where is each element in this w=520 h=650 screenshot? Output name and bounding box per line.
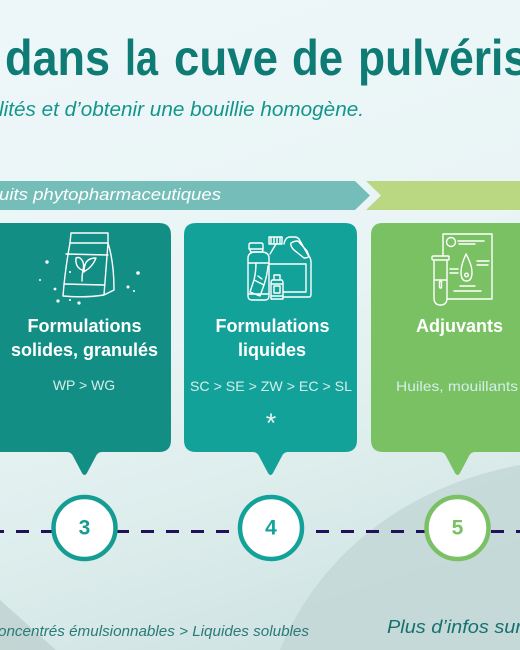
footnote: oncentrés émulsionnables > Liquides solubles [0, 623, 309, 640]
heading: solid formulations: Formulations [27, 316, 142, 336]
title: la [125, 30, 159, 86]
step 4 [240, 497, 302, 559]
heading: adjuvants: Adjuvants [416, 316, 503, 336]
subtitle: lités et d’obtenir une bouillie homogène. [0, 98, 364, 121]
title: de [292, 30, 343, 86]
panel: adjuvants [371, 223, 520, 475]
heading: liquid formulations: Formulations [215, 316, 330, 336]
asterisk: * [266, 408, 277, 438]
step 3 [54, 497, 116, 559]
step 3: 3 [79, 516, 90, 540]
panel: solid formulations [0, 223, 171, 475]
dashed timeline [0, 530, 520, 533]
text: SC > SE > ZW > EC > SL: SC > SE > ZW > EC > SL [190, 378, 352, 394]
step 4: 4 [265, 516, 277, 540]
background shape: large curved form [280, 465, 520, 650]
banner: produits phytopharmaceutiques [0, 181, 370, 210]
icon: bottles and jug [248, 237, 311, 300]
icon: test tube and document [432, 234, 492, 305]
banner: adjuvants [366, 181, 520, 210]
icon: seed bag [39, 233, 140, 305]
step 5 [426, 497, 488, 559]
title: dans [5, 30, 110, 86]
panel: solid formulations: solides, granulés [11, 340, 158, 360]
title: cuve [174, 30, 278, 86]
panel: liquid formulations [184, 223, 357, 475]
title [5, 30, 520, 86]
banner: produits phytopharmaceutiques: uits phytopharmaceutiques [0, 186, 221, 204]
background shape: lower-left corner [0, 600, 56, 650]
panel: liquid formulations: liquides [238, 340, 306, 360]
text: WP > WG: WP > WG [53, 377, 115, 393]
link: more info: Plus d’infos sur [387, 616, 520, 637]
text: huiles, mouillants: Huiles, mouillants [396, 378, 518, 394]
step 5: 5 [452, 516, 464, 540]
